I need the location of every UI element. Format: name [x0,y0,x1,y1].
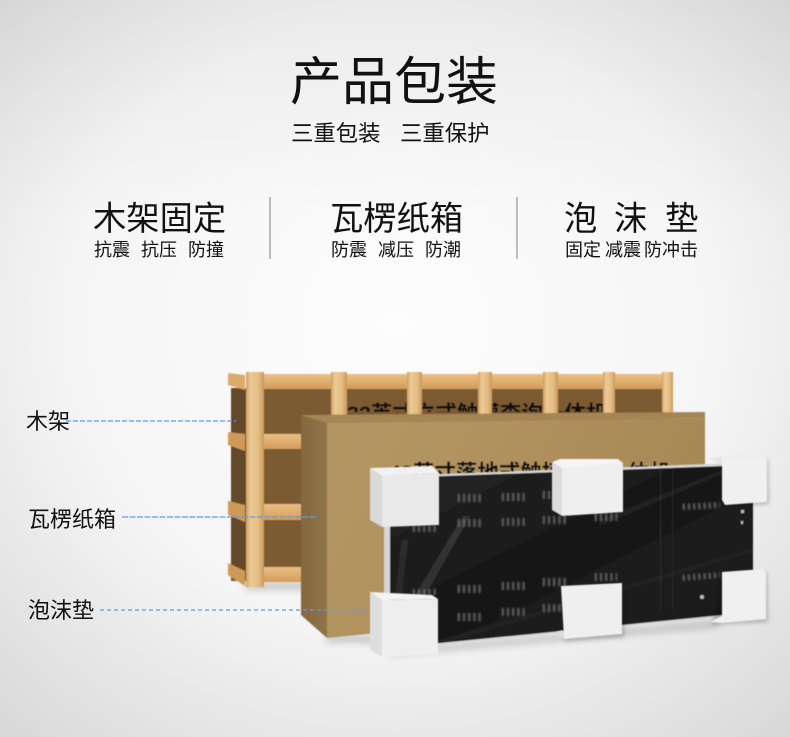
foam corner: top right [710,456,767,505]
label: carton: 瓦楞纸箱 [28,507,116,532]
wooden crate [228,372,673,587]
label: foam: 泡沫垫 [28,598,94,623]
foam corner: top left [370,466,439,527]
screen vents [413,495,720,617]
crate rails [228,373,673,586]
foam corner: top middle [552,459,623,516]
benefits: corrugated carton [331,240,461,260]
leader line: carton [122,516,318,518]
foam corner: bottom right [710,569,766,623]
foam corner: bottom middle [552,583,622,639]
benefits: foam pad: 减震 [605,240,641,260]
screen streaks [395,470,753,645]
benefits: wooden frame [94,240,224,260]
ground shadow [245,583,719,655]
feature: foam pad [564,201,698,260]
benefits: foam pad: 防冲击 [644,240,698,260]
heading: foam pad: 泡 [564,201,597,238]
title: 产品包装 [290,54,498,112]
box printed text: 43英寸落地式触摸查询一体机 [389,461,671,485]
benefits: foam pad: 固定 [565,240,601,260]
screen indicators [700,510,744,599]
subtitle right: 三重保护 [400,121,490,146]
leader line: foam [100,609,367,611]
subtitle: 三重包装 [291,121,381,146]
benefits: wooden frame: 抗震 [94,240,130,260]
foam shadows [562,459,769,641]
benefits: wooden frame: 防撞 [188,240,224,260]
box top [301,412,705,423]
kiosk screen [390,465,753,648]
feature: corrugated carton [330,201,463,260]
heading: foam pad: 垫 [665,201,698,238]
benefits: corrugated carton: 防潮 [425,240,461,260]
kiosk edge [384,464,722,650]
heading: wooden frame: 木架固定 [93,201,226,238]
heading: foam pad: 沫 [614,201,647,238]
benefits: corrugated carton: 减压 [378,240,414,260]
heading: corrugated carton: 瓦楞纸箱 [330,201,463,238]
benefits: corrugated carton: 防震 [331,240,367,260]
cardboard box [301,412,705,638]
crate printed text: 32英寸立式触摸查询一体机 [347,401,608,426]
product illustration [228,372,769,657]
benefits: wooden frame: 抗压 [141,240,177,260]
feature: wooden frame [93,201,226,260]
touchscreen kiosk [384,464,753,650]
heading: foam pad [564,201,698,238]
box front [327,418,705,638]
box side [301,415,327,638]
leader line: wooden frame [66,420,236,422]
label: wooden frame: 木架 [26,409,70,434]
crate back panel [231,388,670,581]
crate posts [246,372,673,587]
benefits: foam pad [565,240,698,260]
foam corner: bottom left [370,592,438,657]
